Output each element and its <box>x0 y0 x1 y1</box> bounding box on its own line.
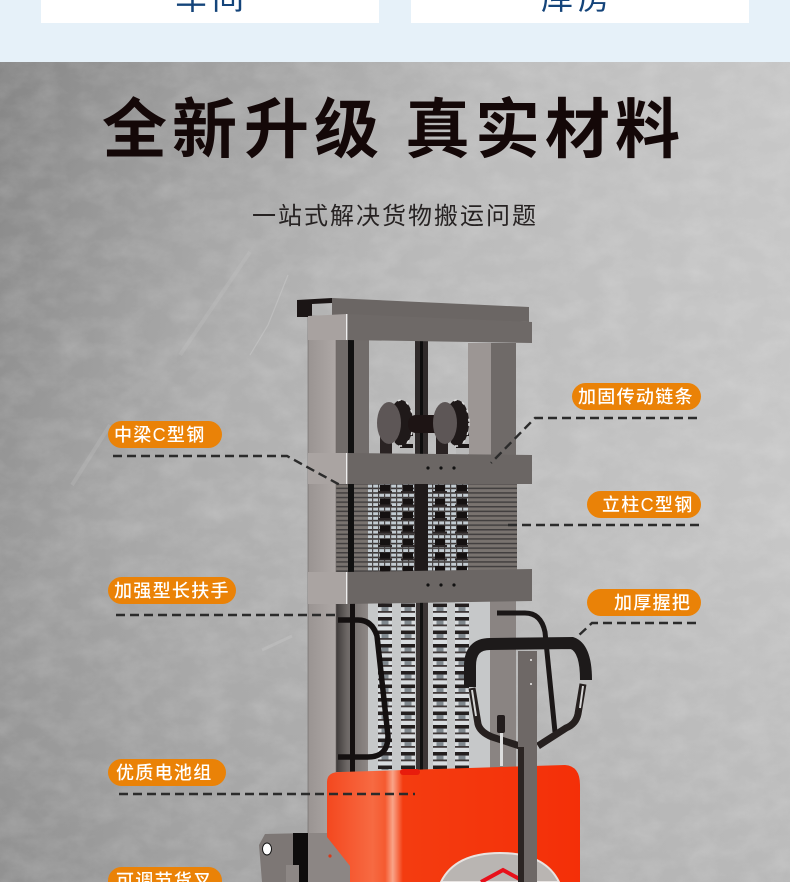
callout: column C steel: 立柱C型钢 <box>602 495 694 515</box>
callout: reinforced handle: 加强型长扶手 <box>114 581 230 601</box>
left outer column <box>308 316 336 836</box>
body badge <box>441 853 559 882</box>
callout: drive chain <box>491 383 701 463</box>
rear right handle <box>497 613 555 732</box>
callout: thick grip: 加厚握把 <box>614 593 691 613</box>
red knob on top of body <box>400 769 420 775</box>
panel: top light blue band <box>0 0 790 62</box>
bottom left fork bracket <box>259 833 350 882</box>
mast: lower rear background with chains <box>336 600 516 772</box>
callout: drive chain: 加固传动链条 <box>578 387 694 407</box>
chain sprockets <box>377 400 469 454</box>
callout: middle beam C steel <box>108 421 340 485</box>
callout: column C steel <box>505 491 701 525</box>
forklift illustration <box>259 298 586 882</box>
subtitle: 一站式解决货物搬运问题 <box>252 203 536 230</box>
tiller post <box>518 651 537 882</box>
callout: thick grip <box>578 589 701 636</box>
title: 全新升级真实材料 <box>102 93 680 166</box>
callout: reinforced handle <box>108 577 340 615</box>
callout: adjustable fork <box>108 867 222 882</box>
card: workshop <box>41 0 379 23</box>
callout: battery: 优质电池组 <box>116 763 212 783</box>
callout: middle beam C steel: 中梁C型钢 <box>114 425 206 445</box>
front grip handle <box>470 643 586 766</box>
reinforced side handle <box>338 620 388 757</box>
top cap plate <box>297 298 532 343</box>
battery body <box>327 765 580 882</box>
middle cross beam lower <box>308 569 532 604</box>
mast: wire grid section <box>336 484 517 572</box>
callout: battery <box>108 759 415 794</box>
card: warehouse <box>411 0 749 23</box>
mast: upper inner channels <box>336 340 516 488</box>
middle cross beam upper <box>308 453 532 484</box>
